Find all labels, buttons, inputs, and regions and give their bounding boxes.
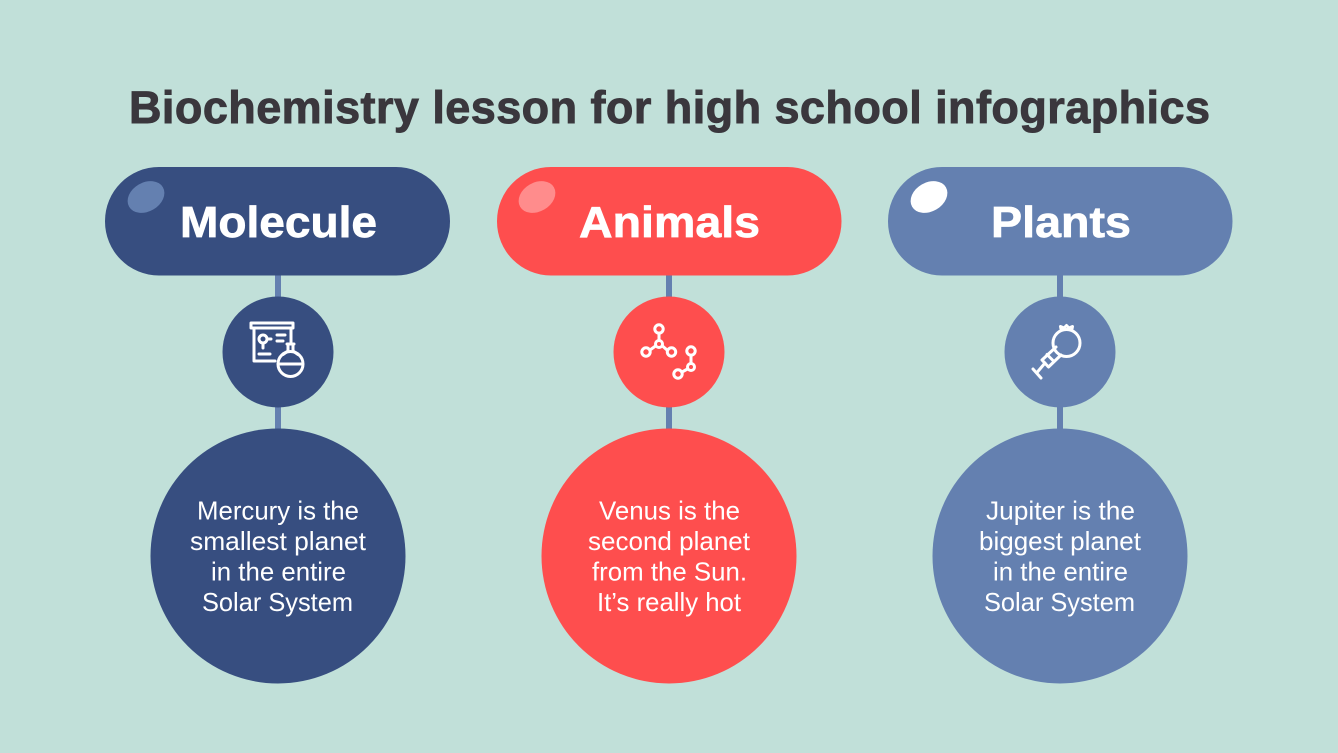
highlight: plants	[905, 175, 953, 219]
text circle: plants	[932, 428, 1188, 684]
connector lines: plants	[1057, 275, 1063, 429]
heading: molecule: Molecule	[180, 198, 377, 247]
panel: animals	[497, 167, 842, 684]
description: animals: It’s really hot	[597, 587, 742, 617]
description: animals: second planet	[588, 526, 751, 556]
icon circle: animals	[614, 296, 724, 408]
header pill: animals	[497, 167, 842, 276]
description: plants: Jupiter is the	[986, 496, 1135, 526]
text circle: molecule	[150, 428, 406, 684]
connector lines: animals	[666, 275, 672, 429]
icon: presentation board and flask	[251, 323, 303, 376]
highlight: animals	[513, 175, 561, 219]
description: molecule	[190, 496, 367, 617]
description: animals: Venus is the	[599, 496, 740, 526]
title: Biochemistry lesson for high school infographics	[129, 82, 1210, 133]
connector lines: molecule	[275, 275, 281, 429]
heading: plants: Plants	[991, 198, 1131, 247]
icon circle: plants	[1004, 296, 1116, 408]
header pill: plants	[888, 167, 1232, 276]
text circle: animals	[542, 428, 796, 684]
icon: syringe and fruit	[1033, 326, 1080, 378]
description: molecule: smallest planet	[190, 526, 367, 556]
description: animals	[588, 496, 751, 617]
highlight: molecule	[122, 175, 170, 219]
icon: molecules	[642, 325, 695, 378]
description: molecule: Mercury is the	[197, 496, 359, 526]
description: molecule: Solar System	[202, 587, 353, 617]
description: plants: in the entire	[993, 556, 1128, 586]
heading: animals: Animals	[579, 198, 760, 247]
description: plants: Solar System	[984, 587, 1135, 617]
description: molecule: in the entire	[211, 556, 346, 586]
description: plants: biggest planet	[979, 526, 1142, 556]
panel: molecule	[105, 167, 450, 684]
panel: plants	[888, 167, 1232, 684]
icon circle: molecule	[222, 296, 334, 408]
header pill: molecule	[105, 167, 450, 276]
description: animals: from the Sun.	[592, 556, 747, 586]
description: plants	[979, 496, 1142, 617]
